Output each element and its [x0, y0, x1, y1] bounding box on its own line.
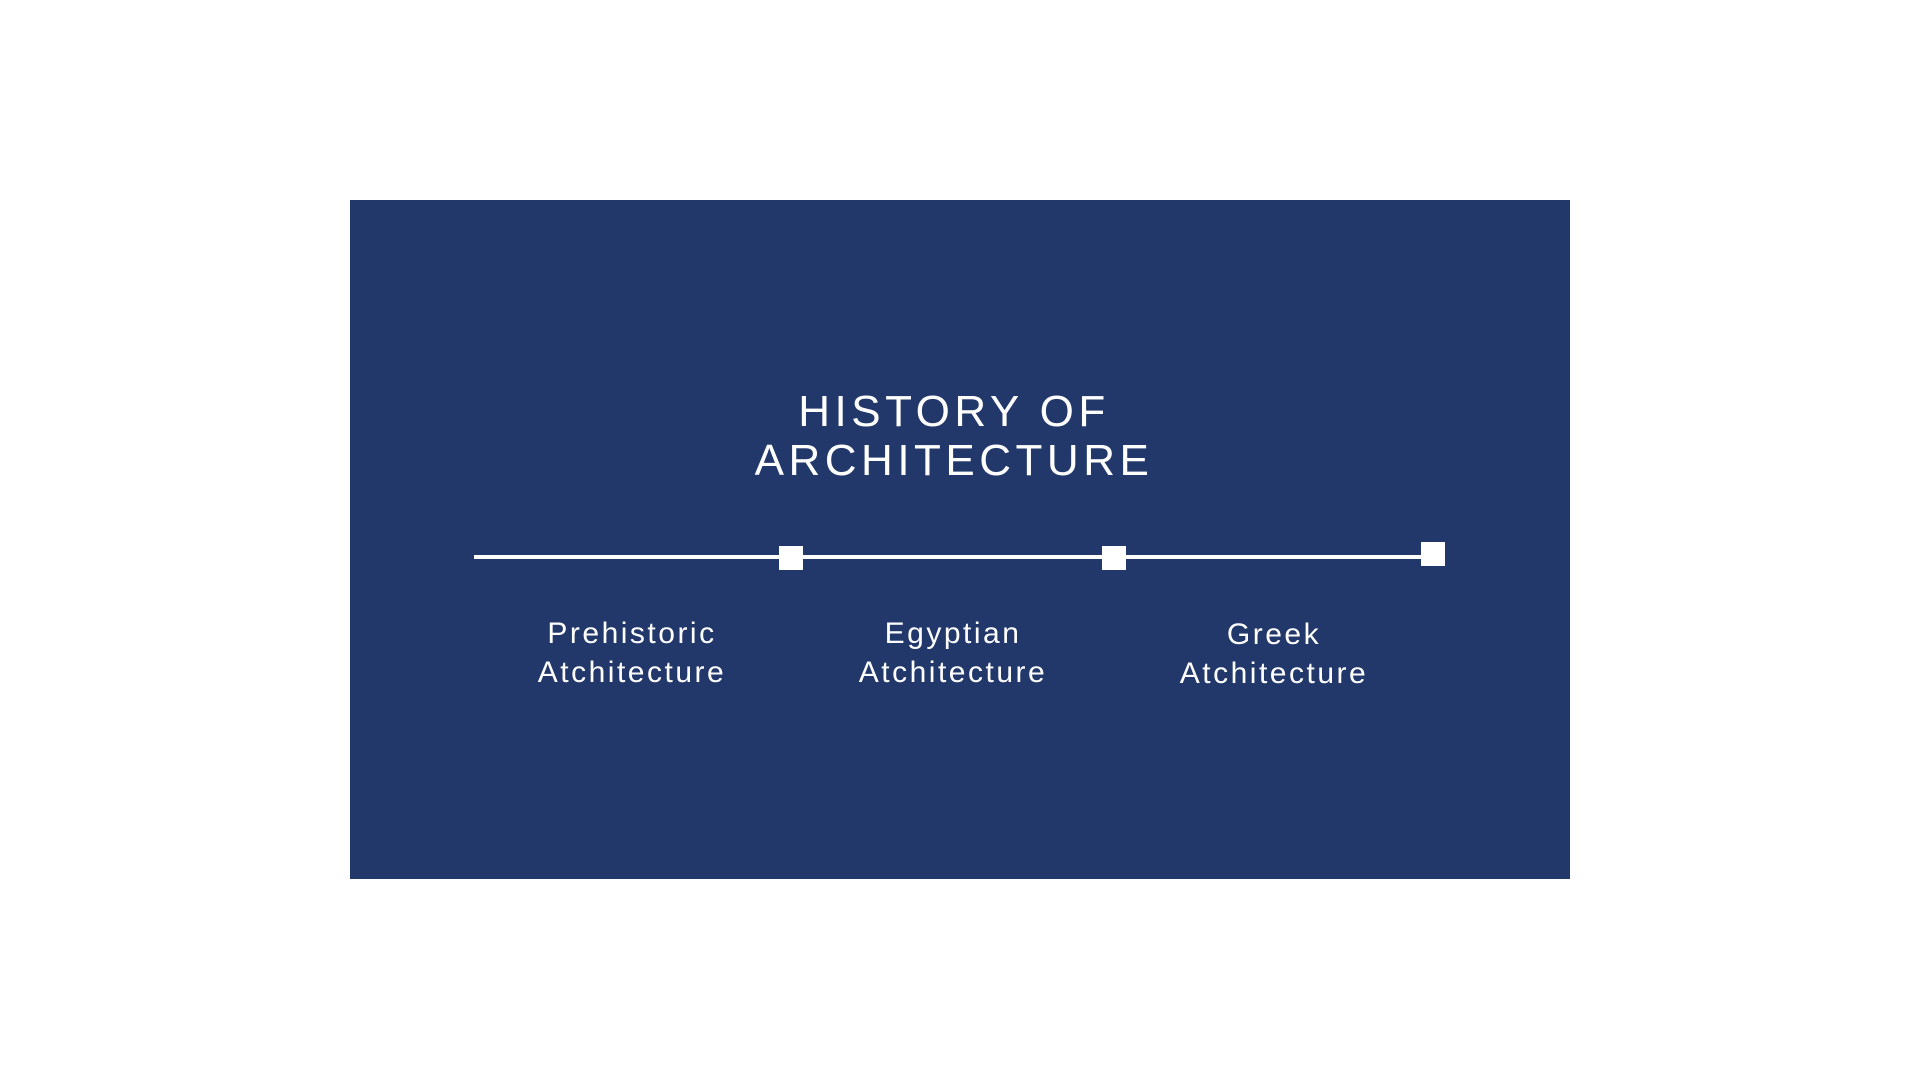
- label: greek: Greek: [1227, 618, 1321, 651]
- label: egyptian: Atchitecture: [859, 656, 1047, 689]
- label: egyptian: Egyptian: [885, 617, 1021, 650]
- marker: prehistoric: [779, 546, 803, 570]
- label: prehistoric: Atchitecture: [538, 656, 726, 689]
- title: HISTORY OF: [798, 387, 1110, 436]
- marker: egyptian: [1102, 546, 1126, 570]
- label: greek: Atchitecture: [1180, 657, 1368, 690]
- label: prehistoric: Prehistoric: [547, 617, 717, 650]
- title: [754, 387, 1153, 485]
- label: egyptian: [858, 617, 1047, 689]
- marker: greek: [1421, 542, 1445, 566]
- title: ARCHITECTURE: [755, 436, 1153, 485]
- timeline line: [474, 555, 1433, 559]
- label: prehistoric: [538, 617, 726, 689]
- panel: main: [350, 200, 1570, 879]
- label: greek: [1180, 618, 1368, 690]
